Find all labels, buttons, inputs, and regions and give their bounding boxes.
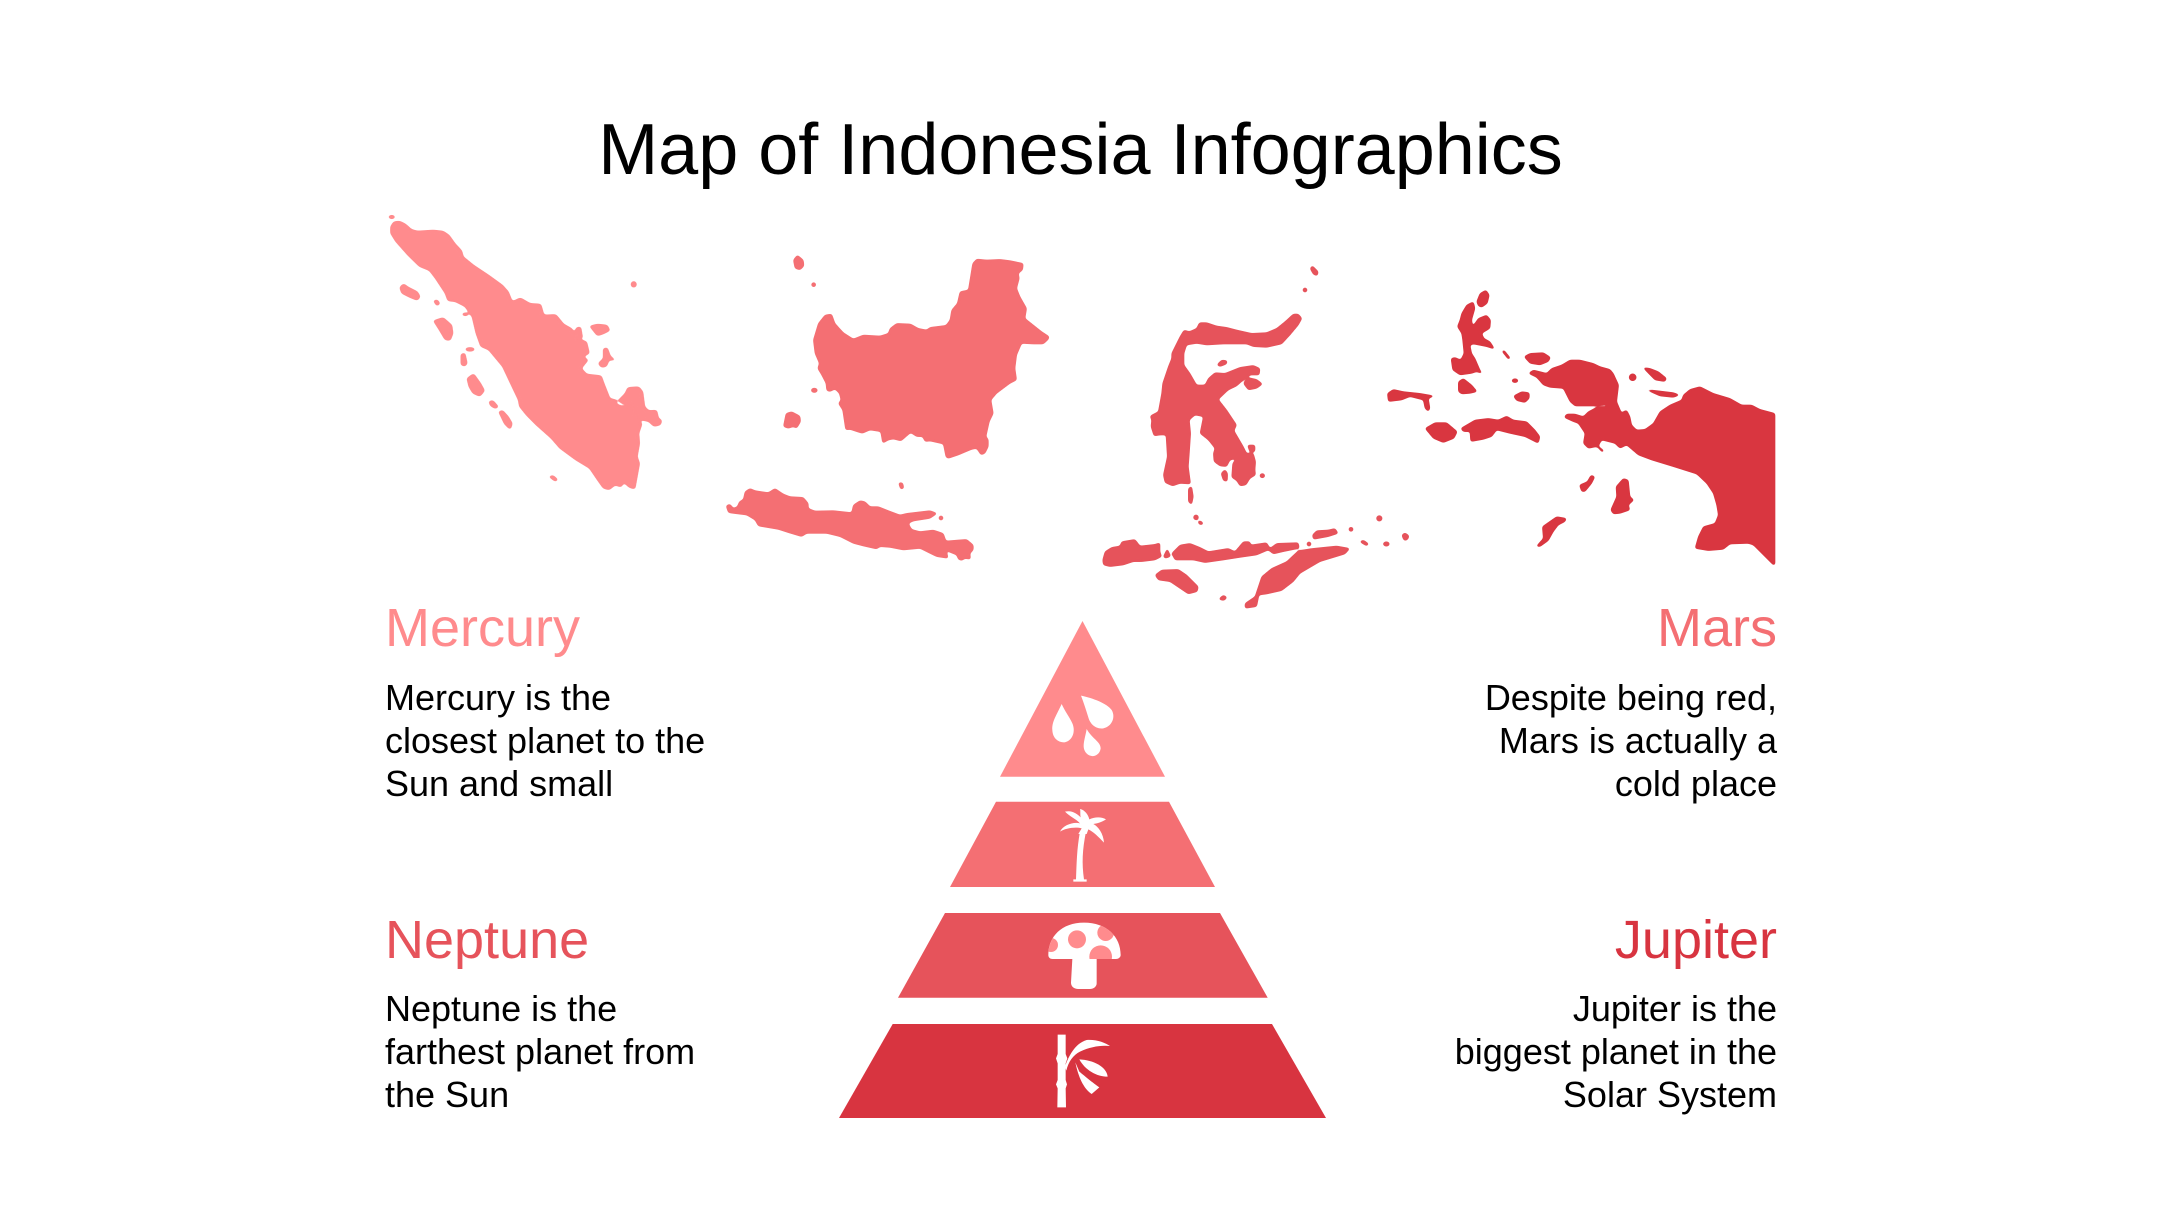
text: Jupiter description: Jupiter is the: [1573, 988, 1777, 1028]
panel: Jupiter: [1455, 910, 1777, 1115]
map: Maluku and Papua region: [1387, 290, 1775, 565]
text: Mercury description: Mercury is the: [385, 677, 611, 718]
panel: Mercury: [385, 598, 705, 804]
icon: water drops: [1052, 696, 1113, 756]
panel: Neptune: [385, 910, 695, 1115]
text: Mercury description: Sun and small: [385, 763, 613, 804]
text: Mars description: Mars is actually a: [1499, 720, 1777, 761]
map: Sulawesi and Lesser Sunda region: [1103, 266, 1409, 608]
heading: Mars: Mars: [1657, 598, 1777, 658]
text: Neptune description: farthest planet from: [385, 1031, 695, 1072]
pyramid tier 2 with palm tree icon: [950, 802, 1215, 887]
pyramid tier 1 with water drops icon: [1000, 621, 1165, 777]
title: Map of Indonesia Infographics: [598, 110, 1563, 190]
map: Sumatra region: [389, 215, 662, 490]
map and pyramid artwork: [388, 215, 1776, 1118]
text: Neptune description: [385, 988, 695, 1115]
text: Mars description: [1485, 677, 1778, 804]
icon: mushroom: [1044, 923, 1121, 989]
text: Neptune description: the Sun: [385, 1074, 509, 1115]
text: Mars description: Despite being red,: [1485, 677, 1777, 718]
heading: Mercury: Mercury: [385, 598, 580, 658]
map: Kalimantan and Java region: [726, 255, 1049, 561]
text: Mars description: cold place: [1615, 763, 1777, 804]
pyramid tier 3 with mushroom icon: [898, 913, 1268, 998]
heading: Jupiter: Jupiter: [1615, 910, 1777, 970]
pyramid tier 4 with bamboo icon: [839, 1024, 1326, 1118]
panel: Mars: [1485, 598, 1778, 804]
text: Mercury description: closest planet to the: [385, 720, 705, 761]
heading: Neptune: Neptune: [385, 910, 589, 970]
icon: palm tree: [1060, 809, 1106, 882]
text: Jupiter description: [1455, 988, 1777, 1115]
text: Jupiter description: biggest planet in the: [1455, 1031, 1777, 1072]
icon: bamboo: [1056, 1035, 1110, 1107]
text: Jupiter description: Solar System: [1563, 1074, 1777, 1115]
text: Mercury description: [385, 677, 705, 804]
text: Neptune description: Neptune is the: [385, 988, 617, 1028]
